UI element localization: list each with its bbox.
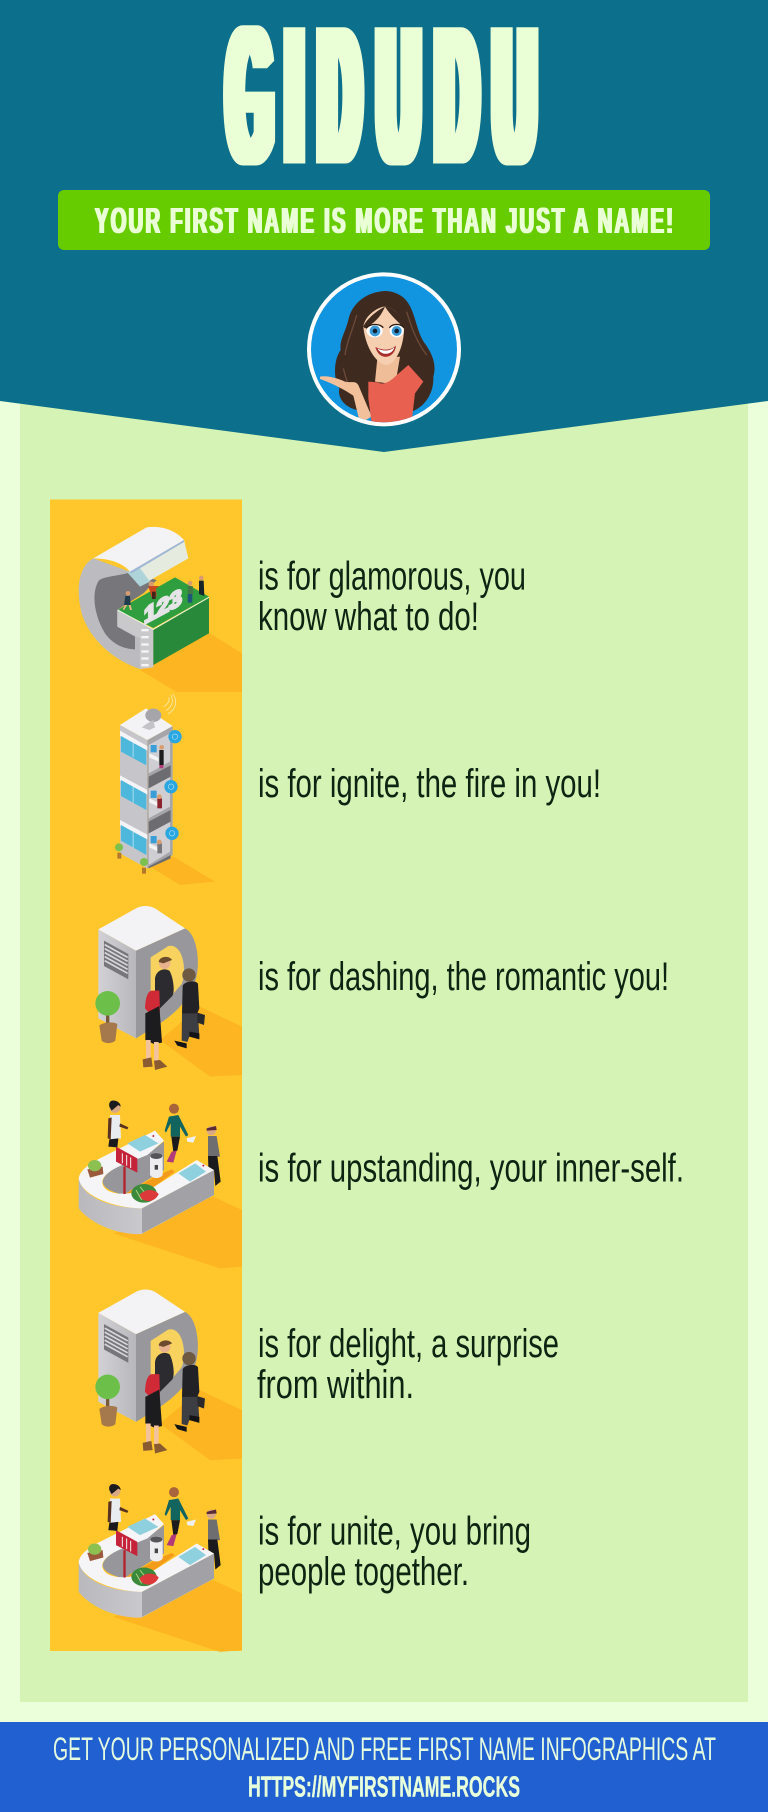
subtitle ribbon: YOUR FIRST NAME IS MORE THAN JUST A NAME!	[95, 202, 673, 242]
text: U second line: people together.	[258, 1550, 469, 1594]
icon: plants	[115, 843, 148, 874]
footer: HTTPS://MYFIRSTNAME.ROCKS	[248, 1772, 520, 1804]
header banner	[0, 0, 768, 452]
text: G line: know what to do!	[258, 595, 479, 639]
icon: satellite dish	[142, 694, 176, 730]
footer	[0, 1722, 768, 1812]
icon: letter U counter repeat	[79, 1484, 242, 1652]
text: U second line: is for unite, you bring	[258, 1510, 531, 1554]
text: D second line: from within.	[257, 1363, 414, 1407]
icon: letter D building repeat	[95, 1289, 242, 1460]
text: G line	[258, 554, 526, 639]
icon: avatar portrait	[307, 272, 461, 426]
text: I line: is for ignite, the fire in you!	[258, 762, 601, 806]
icon: letter I building	[115, 694, 215, 885]
label: 123 sculpture: 123	[144, 584, 182, 630]
text: G line: is for glamorous, you	[258, 554, 526, 598]
icon: letter D building	[95, 906, 242, 1077]
text: D second line	[257, 1322, 559, 1407]
text: U second line	[258, 1510, 531, 1594]
text: D second line: is for delight, a surprise	[258, 1322, 559, 1366]
icon: letter U counter	[79, 1101, 242, 1268]
panel: letter illustrations	[50, 500, 242, 1651]
subtitle ribbon	[58, 190, 710, 250]
panel: main content	[20, 380, 748, 1702]
icon: letter G building	[79, 527, 242, 692]
icon: chat bubbles	[164, 730, 182, 840]
